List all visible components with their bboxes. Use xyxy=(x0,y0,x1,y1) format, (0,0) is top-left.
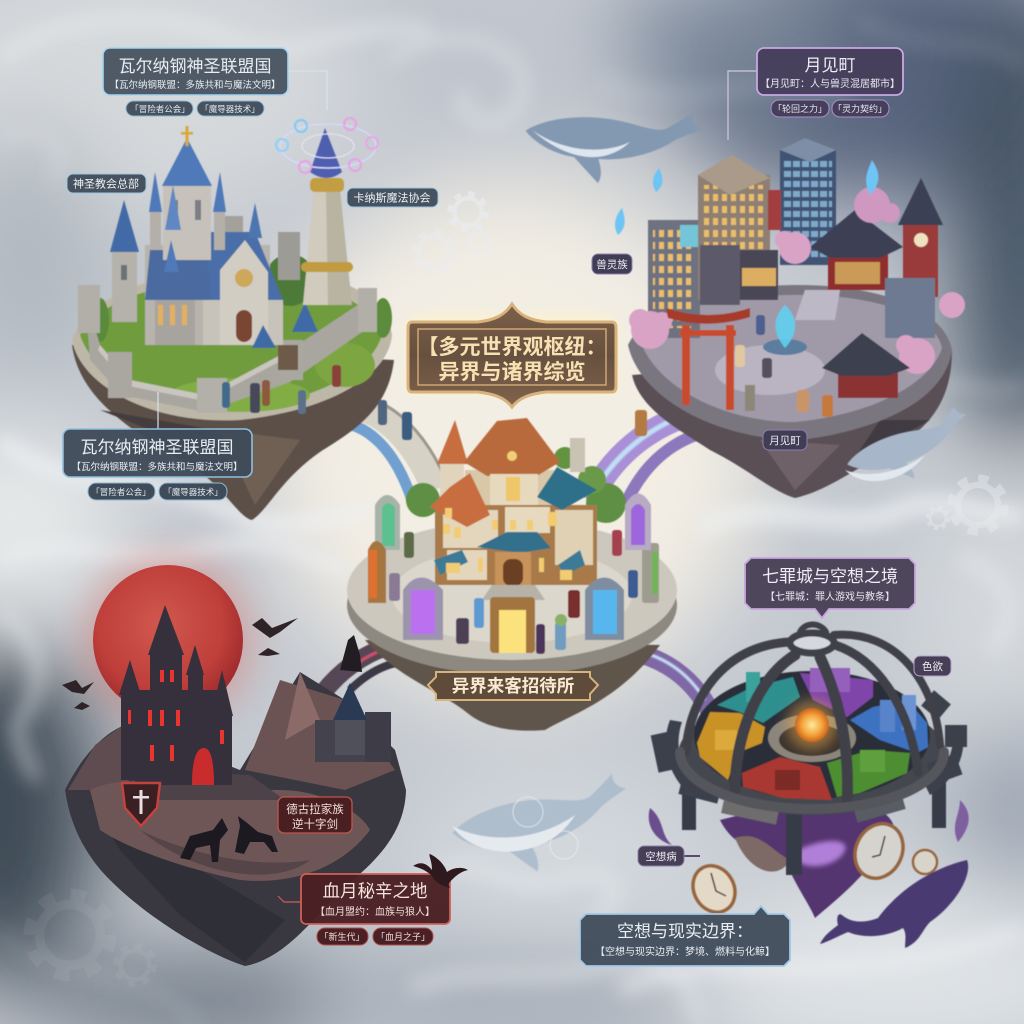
label: hub lobby xyxy=(428,672,598,700)
island: central hub lobby xyxy=(347,418,677,731)
whale: top xyxy=(521,100,705,191)
wolves xyxy=(180,816,278,862)
panel box xyxy=(301,874,450,924)
rock underside xyxy=(365,640,660,731)
plaque glow xyxy=(408,316,616,392)
panel box xyxy=(63,429,252,477)
main lodge xyxy=(570,438,585,472)
tag: 「魔导器技术」 xyxy=(163,487,223,497)
panel: Valnagang lower xyxy=(63,392,252,500)
door and steps xyxy=(495,552,531,587)
label: town name xyxy=(763,430,807,450)
ledge top surface xyxy=(90,781,370,881)
townsfolk xyxy=(635,315,833,436)
shield emblem xyxy=(122,783,160,826)
portal: blue xyxy=(585,578,624,640)
rock underside xyxy=(632,350,952,498)
label: magic association xyxy=(347,188,438,207)
panel subtitle: 【月见町：人与兽灵混居都市】 xyxy=(760,77,900,90)
panel: blood moon xyxy=(278,854,468,945)
label: delusion disease: 空想病 xyxy=(645,850,677,863)
gatehouse xyxy=(278,345,298,370)
shadow mass below xyxy=(720,810,894,918)
island: Valnagang castle xyxy=(72,118,412,520)
island: Tsukimi town xyxy=(615,138,965,498)
vampire figure on bridge xyxy=(340,635,362,672)
torii gate xyxy=(666,308,750,410)
clock tower xyxy=(903,222,938,297)
trees xyxy=(406,483,440,517)
plaque frame xyxy=(408,304,616,407)
panel box xyxy=(103,48,288,95)
tag xyxy=(126,101,193,116)
tag xyxy=(88,483,155,500)
panel subtitle: 【空想与现实边界：梦境、燃料与化鲸】 xyxy=(595,945,775,958)
label: delusion disease xyxy=(638,846,700,866)
blue spirits xyxy=(615,160,878,235)
portal: orange xyxy=(368,541,386,603)
portal: grey-green xyxy=(642,543,659,603)
dark castle xyxy=(119,605,233,785)
clocks xyxy=(685,816,937,920)
label: beast spirits xyxy=(592,254,632,274)
panel title: 空想与现实边界： xyxy=(617,922,753,941)
island: seven sins dome xyxy=(649,624,969,948)
label: Dracula clan: 德古拉家族 xyxy=(286,802,344,816)
sin sectors xyxy=(697,712,765,780)
tag: 「冒险者公会」 xyxy=(91,487,151,497)
portal: purple left xyxy=(403,578,443,640)
arena floor xyxy=(694,671,930,799)
label: church HQ: 神圣教会总部 xyxy=(73,176,139,190)
label: Dracula clan: 逆十字剑 xyxy=(292,817,338,831)
tag: 「灵力契约」 xyxy=(833,103,887,114)
central spire with cross xyxy=(163,185,211,260)
plaque line 1: 【多元世界观枢纽： xyxy=(418,336,606,359)
label: Dracula clan xyxy=(278,797,352,833)
left tower xyxy=(110,200,139,252)
whale: right xyxy=(839,404,984,496)
red shrine xyxy=(828,240,888,290)
panel title: 瓦尔纳钢神圣联盟国 xyxy=(118,57,272,76)
legs xyxy=(682,780,946,875)
label: beast spirits: 兽灵族 xyxy=(596,258,628,271)
panel box xyxy=(580,906,790,966)
magic circle xyxy=(276,118,378,173)
tag: 「新生代」 xyxy=(319,931,365,942)
label: lust xyxy=(914,656,951,676)
label: church HQ xyxy=(67,174,146,193)
bridge: top-right to hub xyxy=(590,402,740,505)
ring base xyxy=(678,695,946,815)
ground xyxy=(628,285,952,440)
portal: green xyxy=(375,495,400,550)
trees xyxy=(265,254,315,306)
tag xyxy=(832,100,889,117)
lower hall xyxy=(838,362,898,398)
island: Blood moon realm xyxy=(62,554,406,966)
platform xyxy=(347,535,677,675)
rock underside xyxy=(72,345,394,520)
label: town name: 月见町 xyxy=(769,435,801,447)
tag: 「血月之子」 xyxy=(376,931,430,942)
panel: Valnagang top xyxy=(103,48,327,116)
panel: Tsukimi xyxy=(728,48,903,140)
decorative gears xyxy=(30,194,1004,984)
portal: gold xyxy=(490,597,535,653)
label: lust: 色欲 xyxy=(922,660,943,673)
modern buildings xyxy=(648,220,700,338)
sector buildings xyxy=(715,730,737,750)
tag: 「魔导器技术」 xyxy=(200,104,260,114)
visitors xyxy=(389,530,638,654)
second keep xyxy=(315,683,391,762)
stairs xyxy=(795,290,840,320)
panel: seven sins xyxy=(745,558,915,618)
panel title: 瓦尔纳钢神圣联盟国 xyxy=(80,438,234,457)
panel subtitle: 【血月盟约：血族与狼人】 xyxy=(315,905,435,918)
sakura trees xyxy=(629,187,965,374)
panel subtitle: 【瓦尔纳钢联盟：多族共和与魔法文明】 xyxy=(109,79,281,91)
panel title: 血月秘辛之地 xyxy=(322,881,428,901)
bat ornament xyxy=(413,854,468,888)
panel box xyxy=(745,558,915,618)
centre core xyxy=(768,714,856,762)
panel subtitle: 【七罪城：罪人游戏与教条】 xyxy=(765,590,895,603)
tag: 「冒险者公会」 xyxy=(130,104,190,114)
connector xyxy=(157,392,159,429)
plaque line 2: 异界与诸界综览 xyxy=(438,361,586,384)
bridge: bottom-right to hub xyxy=(610,648,712,715)
tag xyxy=(159,483,227,500)
main cathedral xyxy=(145,245,270,345)
panel box xyxy=(757,48,903,95)
grass top xyxy=(72,268,392,420)
bridges xyxy=(305,395,740,720)
travellers on wall xyxy=(222,365,412,440)
panel subtitle: 【瓦尔纳钢联盟：多族共和与魔法文明】 xyxy=(71,461,243,473)
rock mass xyxy=(65,672,406,966)
lodge windows xyxy=(443,508,572,580)
tag xyxy=(771,100,829,117)
mid spires xyxy=(248,203,262,238)
whale: bottom centre xyxy=(447,771,637,884)
walls xyxy=(85,295,365,412)
dome ribs xyxy=(680,624,944,809)
label: magic association: 卡纳斯魔法协会 xyxy=(354,190,430,204)
panel title: 七罪城与空想之境 xyxy=(762,567,898,586)
portal: violet xyxy=(625,494,651,550)
panel: border of fantasy and reality xyxy=(580,906,790,966)
hologram fountain xyxy=(763,339,807,355)
title plaque xyxy=(408,304,616,407)
bridge: bottom-left to hub xyxy=(305,640,430,720)
blood moon xyxy=(82,554,254,726)
bats xyxy=(62,618,298,710)
connector xyxy=(278,896,301,902)
bridge: top-left to hub xyxy=(322,395,445,500)
tag xyxy=(197,101,264,116)
panel title: 月见町 xyxy=(804,56,856,75)
purple whale xyxy=(820,860,968,948)
ring clamps xyxy=(651,690,967,825)
mage tower xyxy=(303,190,352,305)
label: hub lobby: 异界来客招待所 xyxy=(452,676,574,696)
tag: 「轮回之力」 xyxy=(773,103,827,114)
tag xyxy=(373,928,433,945)
tag xyxy=(317,928,368,945)
connector xyxy=(728,71,757,140)
connector xyxy=(288,71,327,110)
